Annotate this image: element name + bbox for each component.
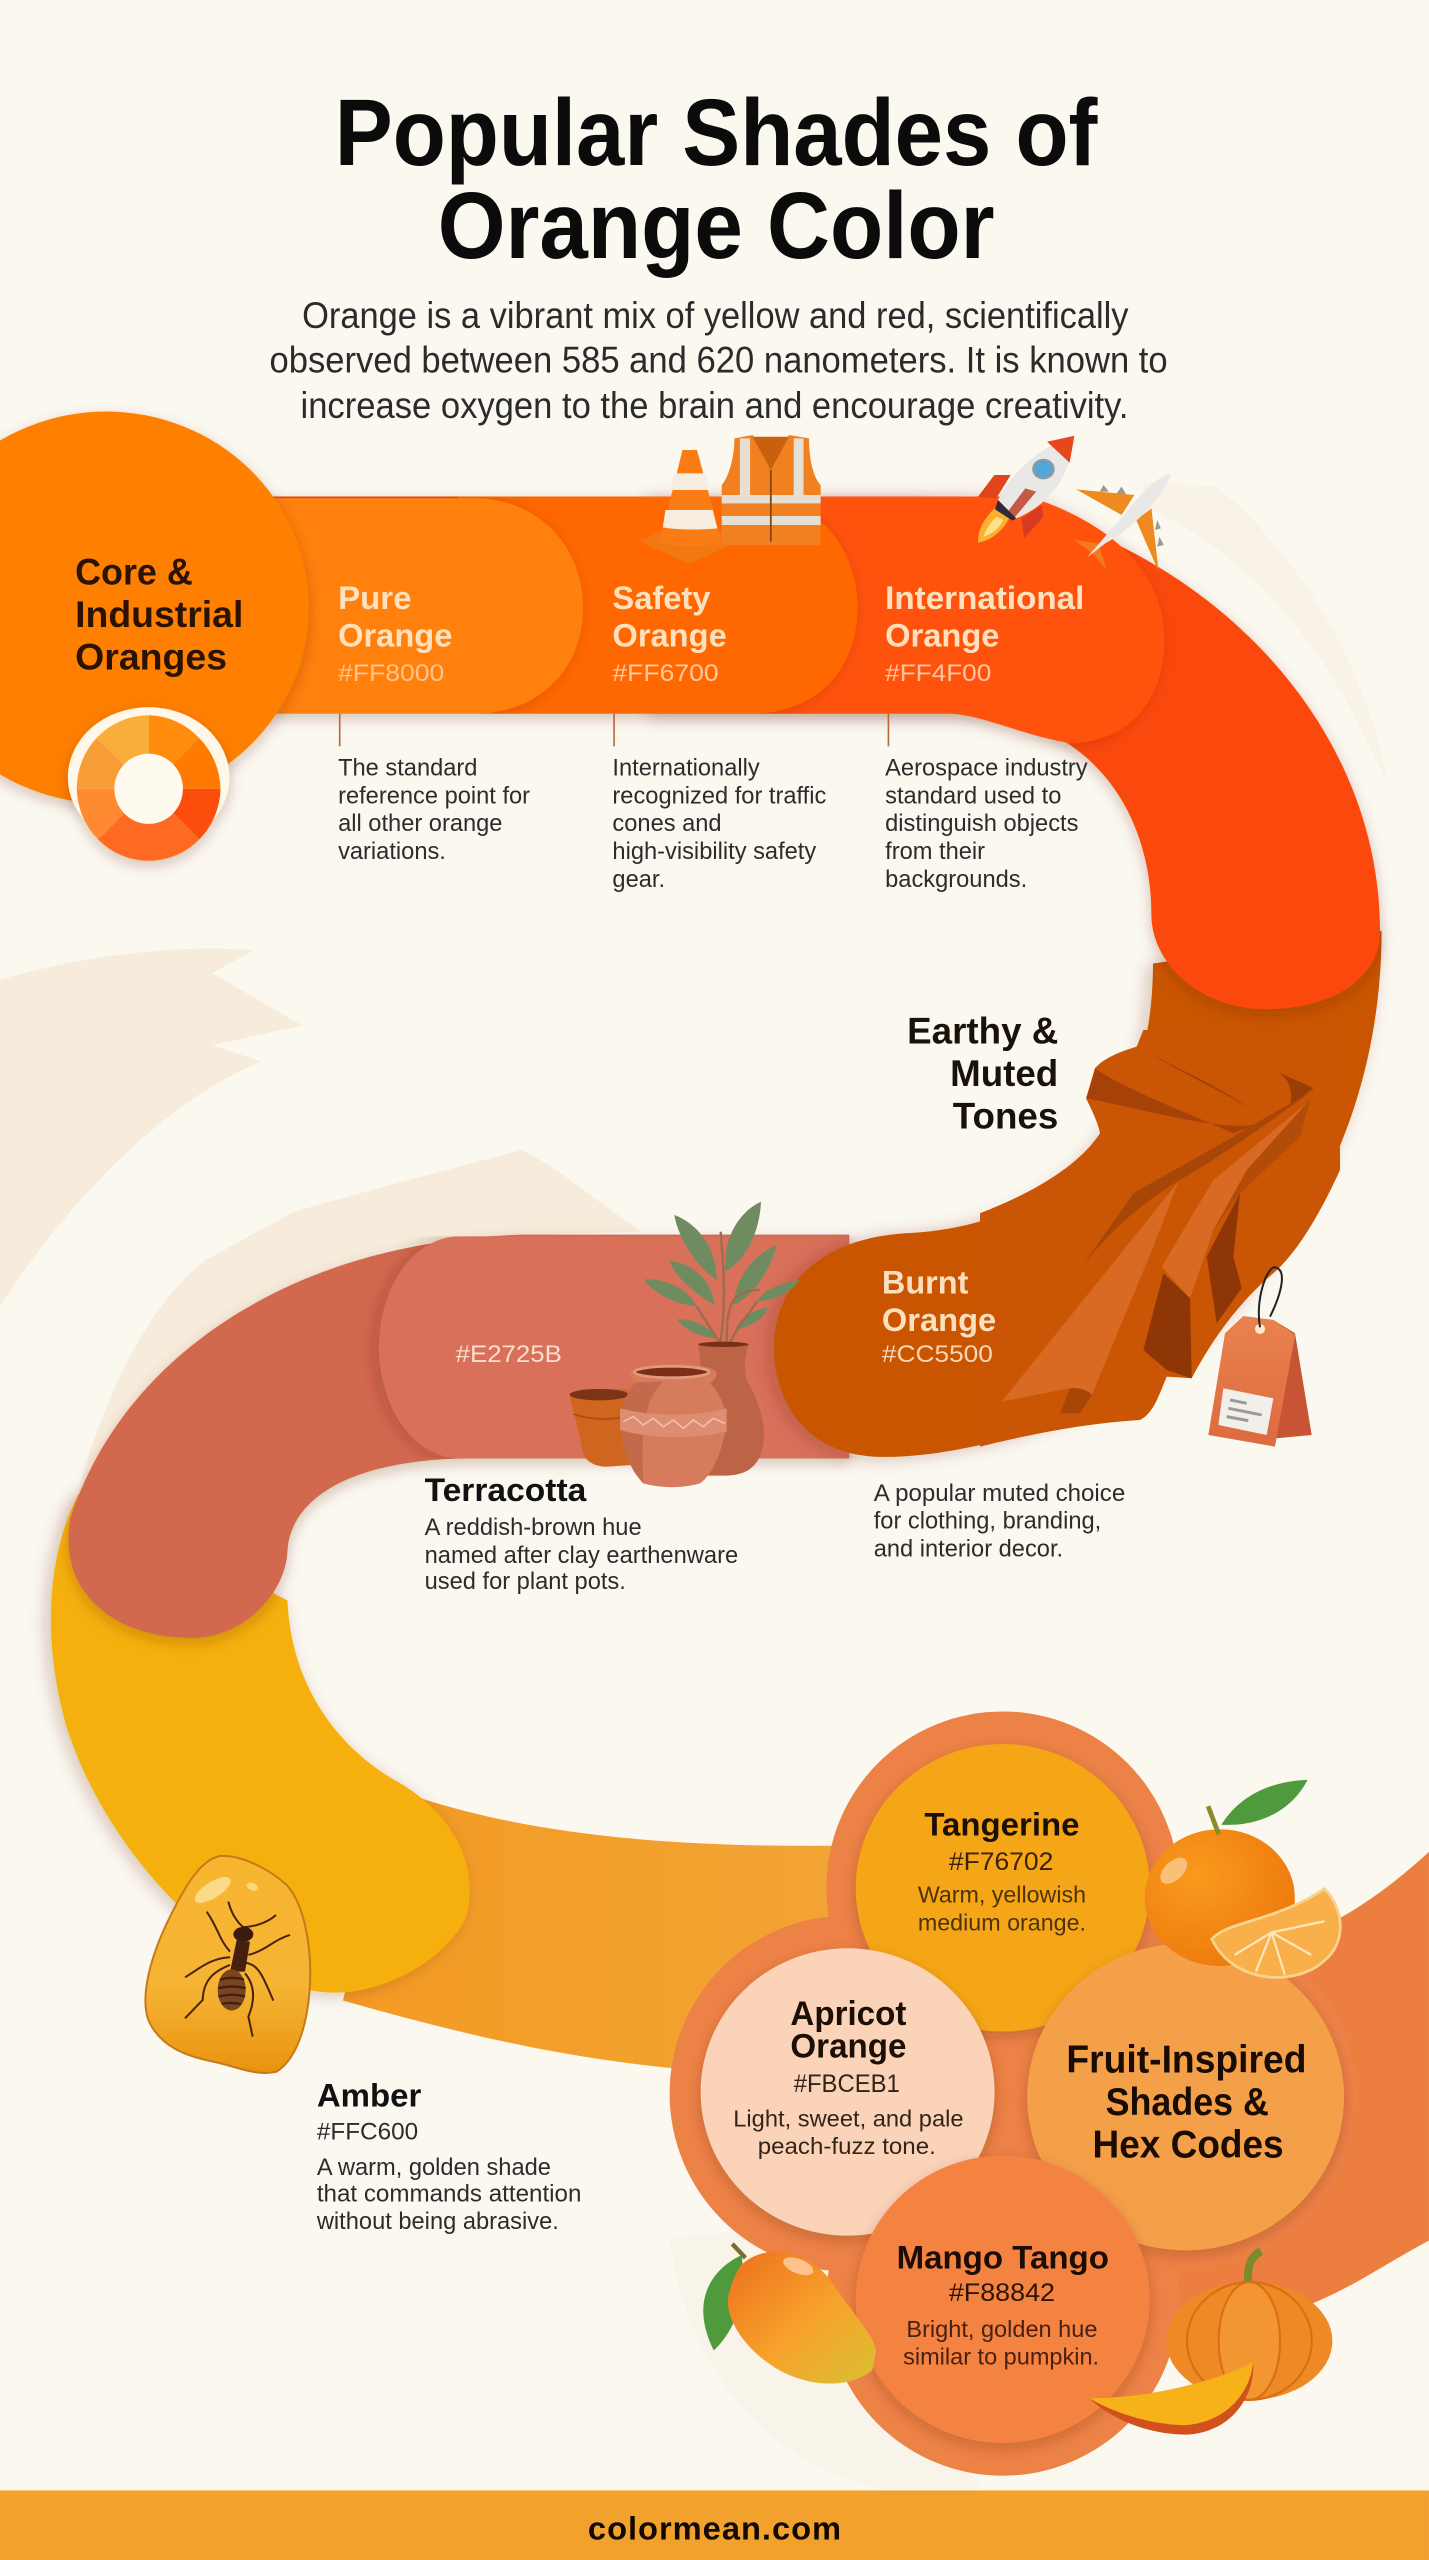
description: terracotta: named after clay earthenware [425,1543,738,1569]
band: burnt orange [774,931,1382,1457]
description: international orange: backgrounds. [885,867,1027,893]
icon: price tag [1208,1267,1312,1447]
intro paragraph [269,295,1168,426]
icon: plant and pots [569,1202,800,1487]
label: burnt orange: #CC5500 [882,1341,993,1368]
icon: safety vest [722,435,821,545]
description: amber: #FFC600 [317,2118,418,2145]
card: apricot orange: Orange [790,2028,906,2066]
description: terracotta: A reddish-brown hue [425,1515,642,1541]
card: mango tango: Mango Tango [897,2238,1109,2275]
heading: core and industrial oranges: Industrial [75,594,243,635]
band: amber to fruit connector [343,1788,915,2071]
card: tangerine: #F76702 [949,1848,1053,1876]
description: amber: without being abrasive. [316,2209,559,2235]
leader lines [340,714,888,746]
cap: international orange [653,496,1164,743]
description: safety orange: gear. [612,867,665,893]
label: safety orange: Safety [612,579,710,616]
title [335,80,1098,279]
background brush strokes [0,482,1388,2489]
description: international orange [885,756,1088,893]
plant leaves [644,1202,800,1343]
icon: mango [703,2244,876,2384]
icon: colour wheel donut [68,707,229,861]
label: safety orange: Orange [612,617,727,654]
icon: traffic cone [640,450,738,564]
description: burnt orange: and interior decor. [874,1536,1063,1562]
footer bar: colormean.com [588,2509,841,2546]
card: apricot orange: Apricot [790,1995,906,2033]
heading: core and industrial oranges: Oranges [75,637,227,678]
label: pure orange: Pure [338,579,412,616]
cap: safety orange [457,496,857,714]
heading: earthy and muted tones [907,1011,1058,1136]
fruit icons [703,1780,1340,2435]
card: mango tango: similar to pumpkin. [903,2344,1099,2370]
description: pure orange: variations. [338,839,446,865]
card: mango tango: #F88842 [949,2279,1055,2307]
cap: pure orange [245,498,583,714]
terracotta swatch cap [379,1236,849,1458]
icon: airplane [1074,474,1171,572]
description: amber [316,2077,581,2235]
description: burnt orange: A popular muted choice [874,1481,1125,1507]
label: burnt orange [882,1263,996,1368]
card: fruit-inspired heading [1027,1943,1344,2250]
description: international orange: from their [885,839,985,865]
description: terracotta: Terracotta [425,1471,587,1508]
intro paragraph: observed between 585 and 620 nanometers. It is known to [269,339,1168,380]
small pot [569,1389,632,1467]
description: amber: A warm, golden shade [317,2155,551,2181]
description: pure orange: reference point for [338,783,530,809]
card: mango tango [856,2156,1150,2443]
label: international orange [885,579,1084,687]
description: safety orange [612,756,826,893]
card: fruit-inspired heading: Fruit-Inspired [1066,2038,1306,2081]
label: international orange: #FF4F00 [885,660,991,687]
description: terracotta: used for plant pots. [425,1569,626,1595]
intro paragraph: increase oxygen to the brain and encourage creativity. [301,385,1128,426]
card: tangerine [856,1744,1150,2032]
icon: tangerine fruit [1145,1780,1308,1966]
description: amber: Amber [317,2077,422,2114]
description: burnt orange [874,1481,1125,1562]
card: mango tango: Bright, golden hue [906,2316,1097,2342]
label: burnt orange: Orange [882,1301,996,1338]
description: international orange: distinguish objects [885,811,1078,837]
card: apricot orange: #FBCEB1 [794,2070,900,2098]
description: pure orange [338,756,530,865]
description: pure orange: The standard [338,756,477,782]
icon: mango slice [1089,2362,1253,2435]
card: tangerine: Warm, yellowish [918,1882,1086,1908]
label: international orange: International [885,579,1084,616]
band: terracotta [68,1235,849,1638]
description: safety orange: Internationally [612,756,760,782]
panel: fruit circle cluster backdrop [670,1711,1357,2476]
label: terracotta hex: #E2725B [456,1341,562,1368]
heading: earthy and muted tones: Earthy & [907,1011,1058,1052]
description: amber: that commands attention [317,2181,581,2207]
label: pure orange: #FF8000 [338,660,444,687]
icon: amber stone with ant [145,1856,310,2073]
band: international red-orange [245,496,1380,1009]
label: safety orange: #FF6700 [612,660,719,687]
icon: tangerine slice [1212,1889,1340,1977]
card: apricot orange: Light, sweet, and pale [733,2105,964,2131]
panel: core circle [0,412,309,803]
heading: core and industrial oranges [75,552,243,678]
icon: pumpkin [1166,2251,1332,2400]
footer bar [0,2490,1429,2560]
description: terracotta [425,1471,738,1595]
description: international orange: Aerospace industry [885,756,1088,782]
heading: core and industrial oranges: Core & [75,552,193,593]
card: fruit-inspired heading: Shades & [1106,2081,1269,2124]
description: pure orange: all other orange [338,811,502,837]
card: fruit-inspired heading: Hex Codes [1093,2123,1284,2166]
card: apricot orange [701,1948,995,2236]
icon: draped cloth [980,1030,1340,1447]
description: safety orange: recognized for traffic [612,783,826,809]
card: apricot orange: peach-fuzz tone. [758,2133,936,2159]
band: right fruit section [1062,1852,1429,2319]
heading: earthy and muted tones: Tones [953,1095,1058,1136]
label: pure orange: Orange [338,617,452,654]
icons: cone, vest, rocket, airplane [640,435,1171,572]
description: international orange: standard used to [885,783,1061,809]
title: Orange Color [438,173,995,279]
card: tangerine: Tangerine [924,1806,1079,1843]
description: safety orange: high-visibility safety [612,839,816,865]
label: burnt orange: Burnt [882,1263,969,1300]
patterned jar [621,1364,726,1487]
band: amber yellow [51,1494,470,1993]
heading: earthy and muted tones: Muted [950,1053,1058,1094]
description: safety orange: cones and [612,811,722,837]
label: international orange: Orange [885,617,999,654]
icon: rocket [978,436,1074,543]
intro paragraph: Orange is a vibrant mix of yellow and red, scientifically [302,295,1129,336]
label: pure orange [338,579,452,687]
card: tangerine: medium orange. [918,1909,1086,1935]
label: safety orange [612,579,727,687]
title: Popular Shades of [335,80,1098,186]
description: burnt orange: for clothing, branding, [874,1509,1101,1535]
tall vase [698,1343,764,1476]
